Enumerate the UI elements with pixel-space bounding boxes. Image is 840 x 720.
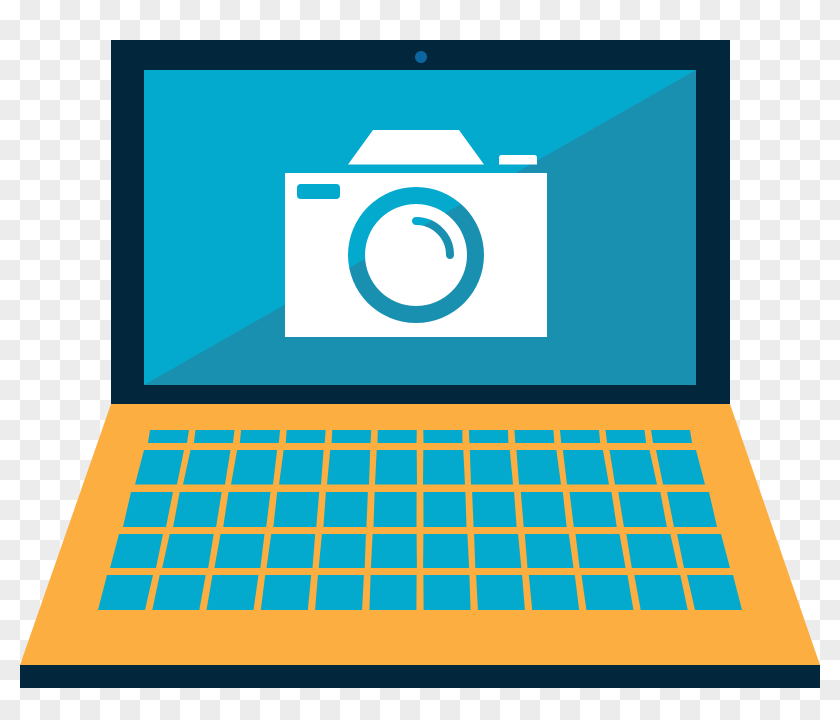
keyboard row 5 <box>98 575 742 610</box>
keyboard row 2 <box>135 450 705 484</box>
display panel <box>144 70 696 385</box>
icon: camera <box>285 130 547 337</box>
camera body with lens <box>285 173 547 337</box>
camera shutter button <box>499 155 537 164</box>
screen bezel <box>111 40 730 404</box>
keyboard row 4 <box>110 534 730 568</box>
laptop base <box>20 404 820 665</box>
screen glare diagonal <box>144 70 696 385</box>
laptop screen <box>111 40 730 404</box>
keyboard row 3 <box>123 492 717 527</box>
laptop front edge <box>20 665 820 688</box>
keyboard <box>98 430 742 610</box>
camera viewfinder top <box>348 130 484 164</box>
webcam <box>415 51 427 63</box>
keyboard row 1 <box>148 430 692 443</box>
